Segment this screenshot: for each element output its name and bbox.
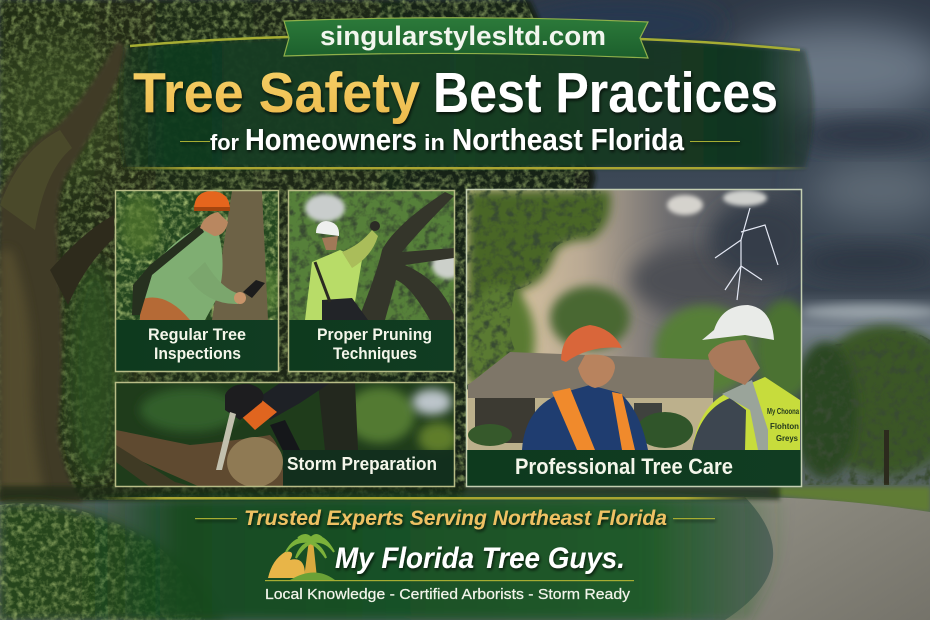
subtitle xyxy=(180,122,740,157)
photo: chainsaw on fallen log xyxy=(116,383,458,487)
vest lettering: Flohton xyxy=(770,422,799,431)
logo wordmark: My Florida Tree Guys. xyxy=(335,542,625,575)
panel: regular tree inspections xyxy=(116,190,279,372)
caption: Regular Tree xyxy=(148,325,246,344)
caption: Techniques xyxy=(333,344,417,363)
photo: two arborists talking before a house under a storm xyxy=(465,190,815,450)
right worker xyxy=(692,305,800,450)
gold rule: top right xyxy=(640,39,800,50)
logo underline xyxy=(265,580,634,581)
subtitle: Homeowners xyxy=(245,122,417,157)
card frame xyxy=(466,190,802,486)
storm sky xyxy=(467,190,801,450)
background: right trees, lawn and road xyxy=(725,325,930,620)
background: lower-left bushes xyxy=(0,486,780,620)
subtitle: in xyxy=(424,130,445,155)
card frame xyxy=(288,190,454,372)
shrubs xyxy=(468,424,512,446)
caption: Professional Tree Care xyxy=(515,454,733,479)
ribbon with site name xyxy=(284,18,648,58)
header panel xyxy=(118,18,814,169)
vest lettering: Greys xyxy=(776,434,799,443)
gold rule: top left xyxy=(130,37,290,46)
footer panel xyxy=(80,497,790,620)
caption: Storm Preparation xyxy=(287,454,437,474)
lightning xyxy=(715,208,778,300)
title: Best Practices xyxy=(433,61,778,125)
panel: storm preparation xyxy=(116,382,458,487)
card frame xyxy=(116,382,454,486)
logo icon: palm tree xyxy=(268,535,335,580)
footer strapline: Local Knowledge - Certified Arborists - Storm Ready xyxy=(265,586,631,603)
gold rule: bottom xyxy=(120,167,810,170)
title: Tree Safety xyxy=(133,61,420,125)
trees xyxy=(467,190,611,390)
panel: professional tree care xyxy=(465,190,815,486)
house xyxy=(468,352,715,398)
left worker xyxy=(522,325,648,450)
card frame xyxy=(116,190,278,372)
caption band xyxy=(116,320,278,371)
subtitle: for xyxy=(210,130,239,155)
gold rule: footer top xyxy=(100,497,750,500)
vest lettering: My Choona xyxy=(767,407,799,416)
caption band xyxy=(467,450,801,486)
title xyxy=(133,61,778,125)
subtitle: Northeast Florida xyxy=(452,122,685,157)
caption: Proper Pruning xyxy=(317,325,432,344)
background: forest and oak trunk xyxy=(0,0,596,502)
panel: proper pruning techniques xyxy=(288,190,464,372)
photo: climber pruning limb xyxy=(289,191,464,321)
photo: arborist inspecting trunk xyxy=(116,191,279,322)
footer tagline heading: Trusted Experts Serving Northeast Florida xyxy=(244,507,667,530)
ribbon with site name: singularstylesltd.com xyxy=(320,21,606,51)
caption band xyxy=(283,450,454,486)
caption: Inspections xyxy=(154,344,241,363)
caption band xyxy=(289,320,454,371)
